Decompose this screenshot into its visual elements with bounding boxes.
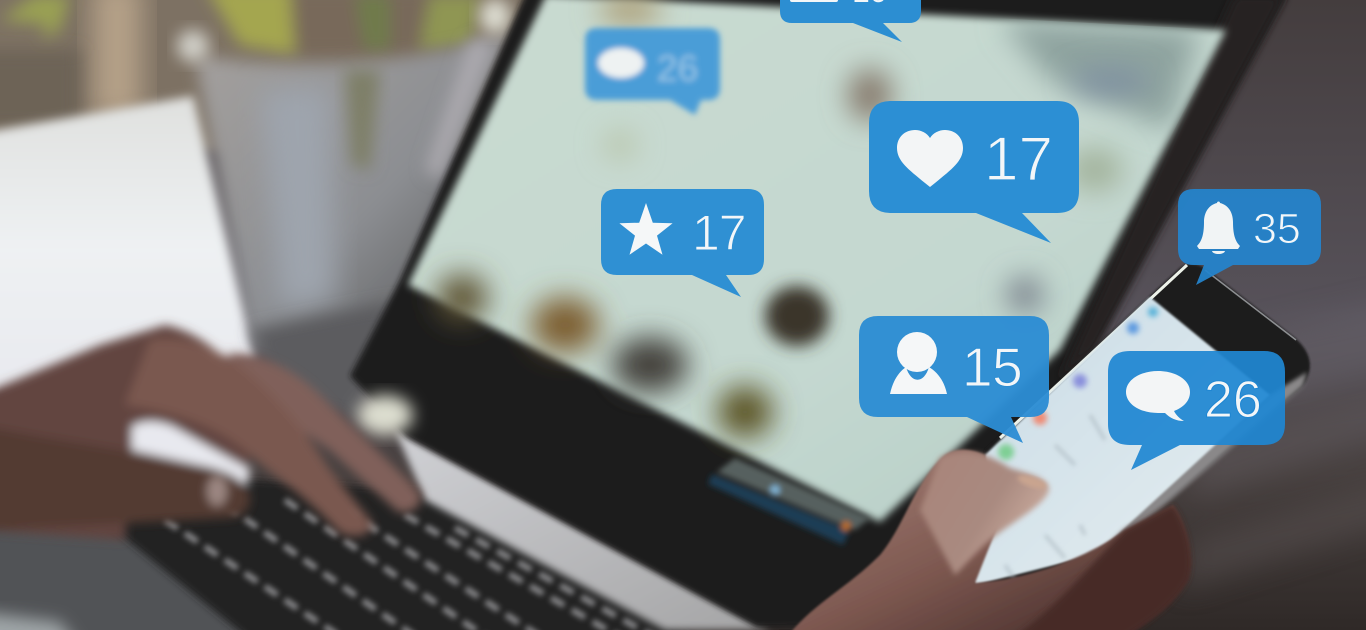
blurred white paper on desk <box>0 96 255 400</box>
icon: bell <box>1197 202 1240 254</box>
notification bubble: star 17 <box>601 189 764 297</box>
notification bubble: bell 35 <box>1178 189 1321 285</box>
middle finger <box>125 339 372 536</box>
notification bubble: comment 26: 26 <box>1204 371 1262 429</box>
laptop screen <box>408 0 1226 545</box>
thumb <box>0 425 250 530</box>
notification bubble: person 15: 15 <box>962 336 1022 398</box>
left hand on keyboard <box>0 325 421 540</box>
gap between fingers <box>132 422 250 484</box>
icon: speech bubble <box>1126 371 1190 421</box>
right hand holding phone <box>785 450 1191 630</box>
notification bubble: blurred comment 26: 26 <box>657 48 698 89</box>
notification bubble: heart 17: 17 <box>984 125 1053 194</box>
notification bubble: person 15 <box>859 316 1049 443</box>
back of hand <box>0 325 250 540</box>
outer finger <box>228 353 421 513</box>
laptop dock <box>708 458 870 545</box>
notification bubble: star 17: 17 <box>692 205 746 261</box>
desk shadow below pot <box>250 300 400 420</box>
notification bubble: heart 17 <box>869 101 1079 243</box>
laptop lid bezel <box>350 0 1290 627</box>
blurred plant pot <box>177 0 515 350</box>
phone screen with blurred list <box>965 297 1270 585</box>
keyboard edge highlight <box>357 395 413 435</box>
icon: heart <box>897 130 963 187</box>
keyboard keys <box>165 500 660 630</box>
icon: person <box>890 332 947 394</box>
notification bubble: comment 26 <box>1108 351 1285 470</box>
blurred wall with light stripe <box>0 0 560 150</box>
phone body <box>975 264 1310 590</box>
notification bubble: top partial <box>780 0 921 42</box>
blurred plant <box>0 0 500 55</box>
laptop base and keyboard <box>0 430 770 630</box>
icon: star <box>619 203 673 255</box>
notification bubble: bell 35: 35 <box>1253 205 1301 253</box>
notification bubble: blurred comment 26 <box>585 28 720 115</box>
thumb <box>920 452 1049 575</box>
thumb nail <box>207 476 227 506</box>
